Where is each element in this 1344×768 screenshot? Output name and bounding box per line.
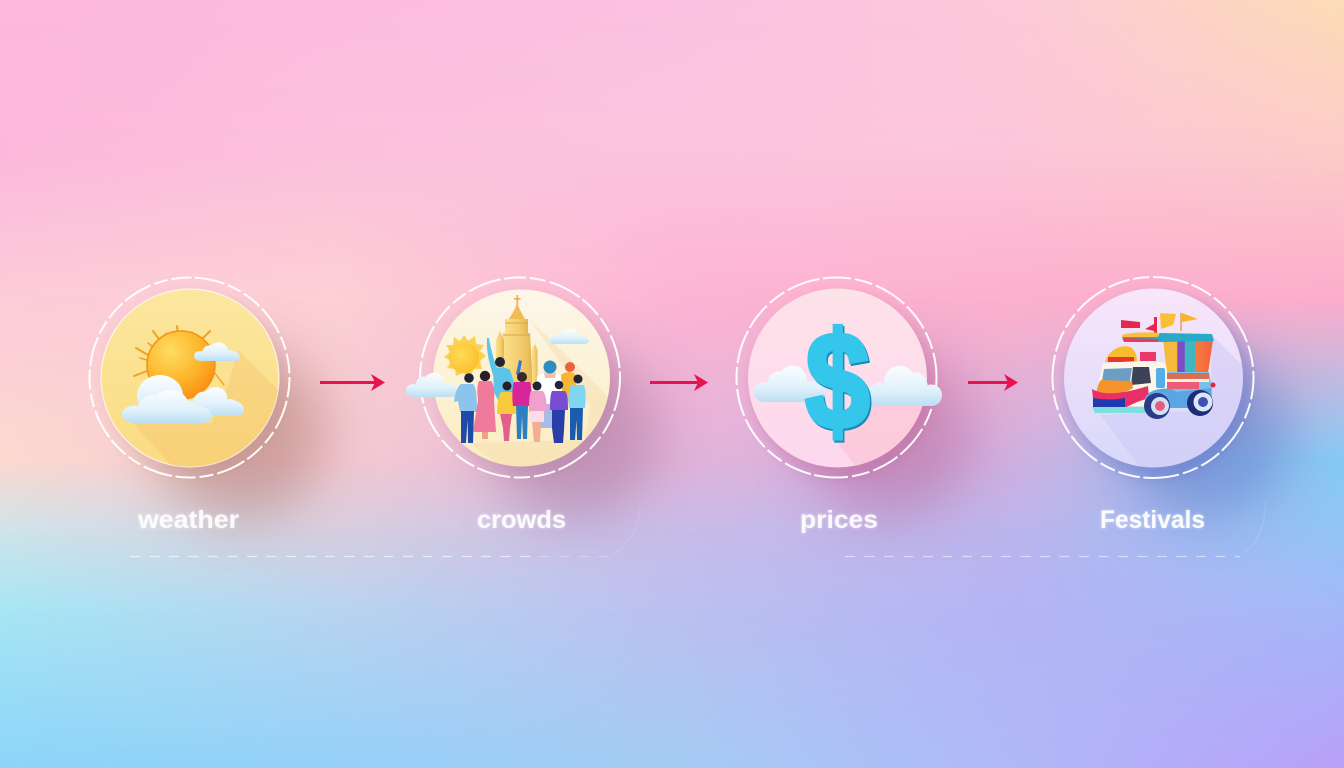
jeepney hood	[1096, 380, 1133, 395]
icon: sun rays	[134, 326, 224, 385]
Festivals disc	[1064, 288, 1243, 468]
person: light blue left	[454, 373, 477, 443]
person: orange	[561, 362, 576, 402]
jeepney roof	[1122, 332, 1214, 342]
jeepney windshield	[1102, 368, 1132, 381]
crowds card shadow	[433, 292, 658, 518]
person: purple	[550, 381, 568, 443]
icon: back cloud top	[137, 375, 183, 417]
icon: crowd of people	[454, 338, 586, 443]
arrow 1	[320, 374, 385, 391]
weather card shadow	[101, 291, 326, 518]
Festivals long shadow	[1100, 336, 1243, 468]
icon: sun and clouds	[122, 326, 244, 423]
step 1: weather	[90, 278, 326, 518]
weather long shadow	[134, 350, 278, 467]
jeepney door panel	[1156, 368, 1165, 388]
person: yellow	[497, 382, 516, 441]
crowds long shadow	[470, 320, 612, 470]
label: prices: prices	[800, 506, 878, 534]
icon: dollar sign: $	[807, 305, 871, 459]
jeepney front wheel	[1144, 393, 1170, 419]
icon: rear cloud	[182, 387, 244, 416]
person: white shirt	[535, 360, 564, 428]
weather disc	[101, 289, 279, 467]
jeepney side window	[1131, 367, 1151, 385]
prices long shadow	[838, 406, 922, 466]
weather dashed ring	[90, 278, 290, 478]
label: crowds: crowds	[477, 506, 566, 534]
jeepney bumper	[1092, 386, 1149, 413]
icon: small cloud	[194, 342, 240, 361]
label: Festivals: Festivals	[1100, 506, 1205, 534]
label: weather: weather	[137, 506, 239, 534]
icon: right cloud	[863, 366, 942, 406]
step 2: crowds	[406, 278, 658, 518]
jeepney rear body	[1164, 372, 1212, 403]
icon: sun	[444, 335, 486, 377]
person: pink top	[529, 382, 547, 442]
Festivals card shadow	[1065, 293, 1290, 518]
step 4: Festivals	[1052, 277, 1290, 518]
arrow 3	[968, 374, 1018, 391]
icon: festival jeepney	[1092, 313, 1216, 419]
person: light blue right	[568, 374, 586, 440]
label: prices: prices	[800, 506, 878, 534]
Festivals dashed ring	[1052, 277, 1254, 478]
icon: left cloud	[406, 373, 458, 397]
crowds disc	[433, 290, 610, 466]
jeepney cab	[1096, 361, 1167, 406]
jeepney canopy panels	[1163, 340, 1213, 373]
prices disc	[748, 288, 927, 468]
person: raised arm	[487, 338, 522, 400]
crowds dashed ring	[420, 278, 620, 478]
icon: right cloud	[549, 329, 589, 344]
person: magenta	[512, 372, 532, 439]
label: weather: weather	[137, 506, 239, 534]
icon: golden tower	[496, 295, 538, 385]
jeepney fender	[1145, 388, 1212, 408]
label: Festivals: Festivals	[1100, 506, 1205, 534]
icon: sun disc	[147, 331, 215, 399]
icon: left cloud	[754, 366, 826, 402]
jeepney tail light	[1210, 382, 1216, 388]
arrow 2	[650, 374, 708, 391]
label: crowds: crowds	[477, 506, 566, 534]
prices dashed ring	[736, 278, 936, 478]
icon: dollar sign: $	[806, 303, 869, 457]
prices card shadow	[749, 293, 974, 518]
jeepney rear wheel	[1187, 390, 1213, 416]
jeepney flags	[1121, 313, 1198, 333]
person: pink dress	[473, 371, 496, 439]
icon: front cloud	[122, 390, 212, 423]
jeepney cab crest	[1105, 346, 1156, 362]
step 3: prices	[736, 278, 974, 518]
